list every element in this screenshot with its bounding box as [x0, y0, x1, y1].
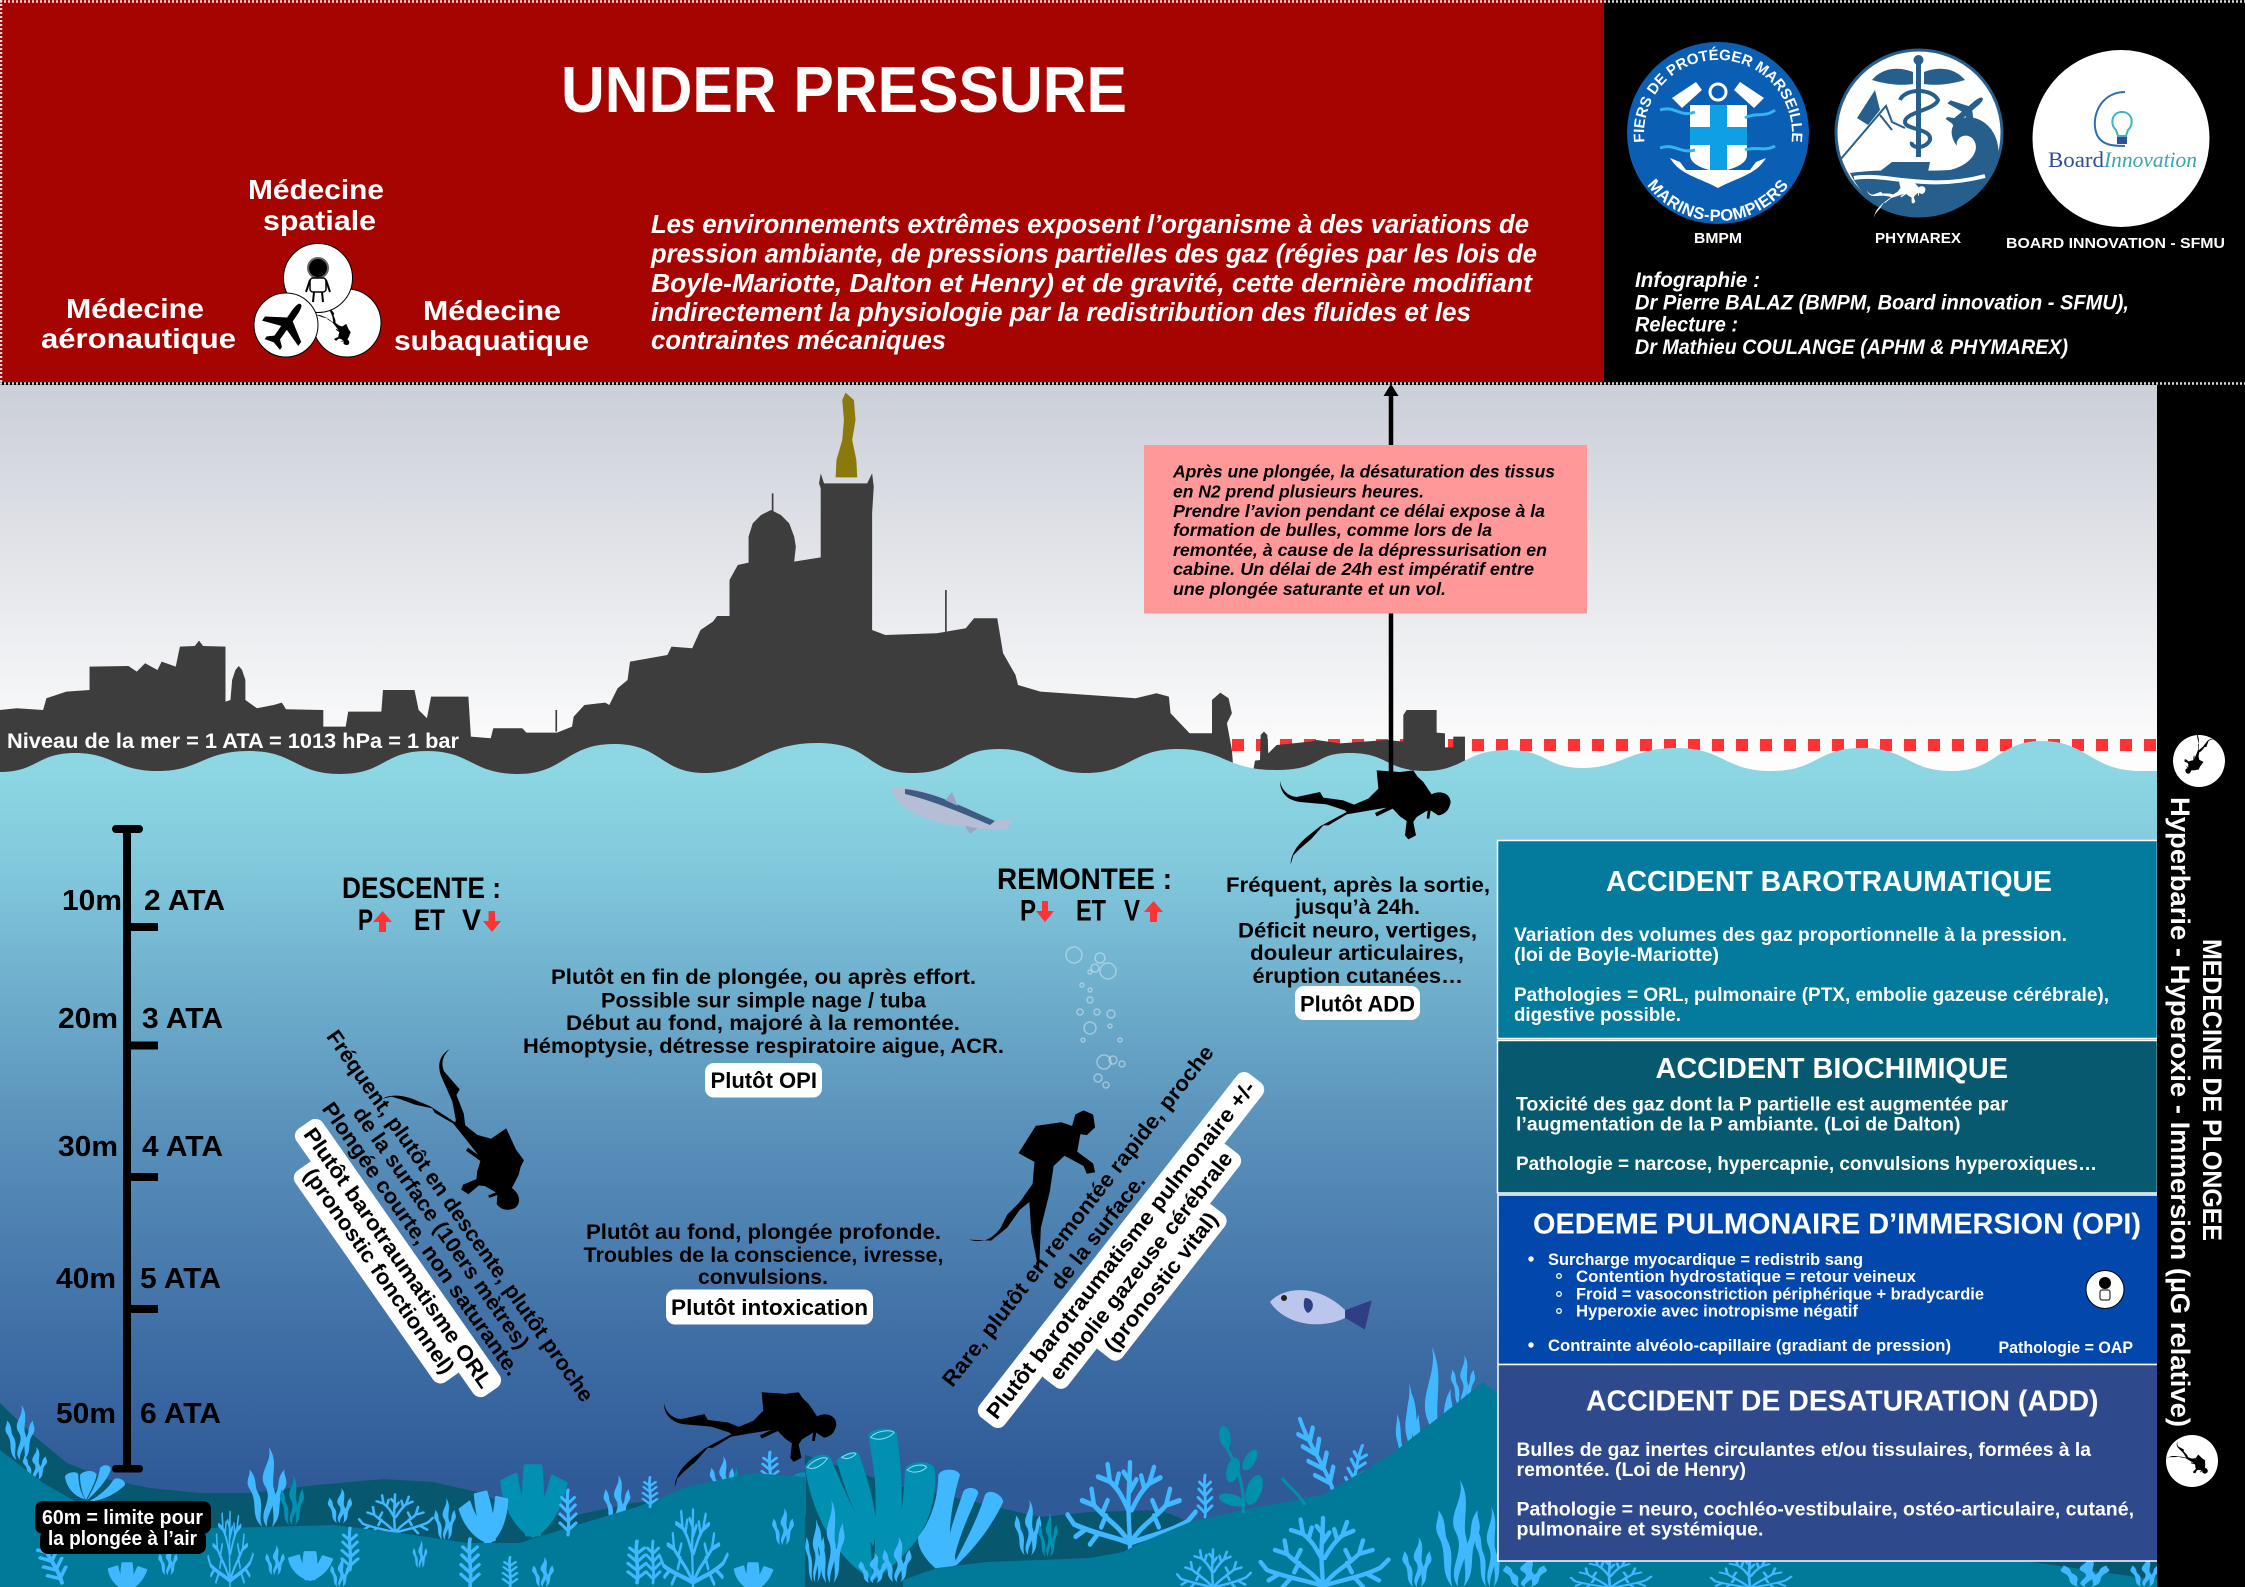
depth scale: 10m	[62, 885, 122, 917]
panel: accident biochimique	[1498, 1040, 2158, 1193]
OPI symptoms text: Hémoptysie, détresse respiratoire aigue, ACR.	[523, 1034, 1004, 1058]
label: médecine subaquatique: subaquatique	[394, 325, 589, 356]
front seaweed and corals	[109, 1480, 2160, 1587]
60m limit label: la plongée à l’air	[48, 1528, 197, 1550]
label: médecine subaquatique: Médecine	[423, 295, 561, 326]
dark teal seaweed	[280, 1467, 1058, 1557]
panel: accident de desaturation: remontée. (Loi de Henry)	[1516, 1459, 1746, 1481]
descent barotrauma badge: Plutôt barotraumatisme ORL	[299, 1123, 497, 1393]
logo captions: BOARD INNOVATION - SFMU	[2006, 235, 2225, 252]
descent barotrauma rotated text: Plongée courte, non saturante.	[317, 1098, 525, 1380]
front corals and ferns	[33, 1477, 1791, 1587]
callout: flying after diving	[1144, 445, 1587, 614]
logo: Board Innovation	[2032, 50, 2210, 227]
panel heading: OEDEME PULMONAIRE D’IMMERSION (OPI)	[1533, 1208, 2141, 1240]
logo captions	[1694, 230, 2225, 252]
panel: accident de desaturation: pulmonaire et systémique.	[1516, 1518, 1764, 1540]
sky background	[0, 385, 2157, 785]
back ferns	[762, 1415, 1370, 1517]
panel: oedeme pulmonaire d'immersion	[1498, 1195, 2158, 1364]
black column edge cover	[2157, 835, 2159, 1565]
side icon: diver top	[2173, 729, 2225, 787]
60m limit label: 60m = limite pour	[42, 1507, 203, 1529]
logo: PHYMAREX	[1836, 50, 2002, 218]
descent barotrauma rotated text: de la surface (10ers mètres)	[348, 1102, 534, 1354]
depth scale	[56, 825, 225, 1472]
header: black partners panel	[1604, 0, 2245, 382]
back corals	[359, 1462, 1196, 1548]
descent heading: P	[358, 904, 373, 937]
seabed back layers	[0, 1403, 2157, 1587]
top diver	[1280, 770, 1451, 864]
callout: flying after diving: formation de bulles, comme lors de la	[1173, 520, 1492, 540]
sea water with waves	[0, 741, 2157, 1587]
OPI symptoms text: Plutôt en fin de plongée, ou après effort.	[551, 965, 976, 989]
back seaweed	[0, 1347, 1475, 1555]
descent heading: DESCENTE :	[342, 872, 501, 905]
descent heading: ET	[414, 904, 445, 937]
60m limit label	[35, 1501, 211, 1554]
callout: flying after diving: Après une plongée, la désaturation des tissus	[1172, 462, 1555, 482]
logo: BMPM: MARINS-POMPIERS	[1648, 178, 1788, 221]
ADD symptoms text: Fréquent, après la sortie,	[1226, 873, 1490, 897]
label: médecine aéronautique: Médecine	[66, 293, 204, 324]
OPI symptoms text: Possible sur simple nage / tuba	[601, 988, 927, 1012]
surface pressure dashed line	[464, 739, 2157, 751]
panel: accident barotraumatique	[1498, 840, 2158, 1038]
logo: BMPM: FIERS DE PROTÉGER MARSEILLE	[1634, 46, 1802, 142]
credits: Dr Mathieu COULANGE (APHM & PHYMAREX)	[1635, 336, 2068, 359]
side heading: médecine de plongée: MEDECINE DE PLONGEE	[2197, 939, 2227, 1241]
intro paragraph: pression ambiante, de pressions partielles des gaz (régies par les lois de	[650, 240, 1537, 268]
ADD symptoms text: jusqu’à 24h.	[1294, 895, 1420, 919]
ADD badge	[1295, 986, 1420, 1020]
bubbles	[1066, 947, 1125, 1088]
callout: flying after diving: une plongée saturante et un vol.	[1173, 579, 1446, 599]
ADD badge: Plutôt ADD	[1300, 992, 1415, 1016]
intro paragraph: contraintes mécaniques	[651, 327, 946, 355]
teal leafy plant	[1219, 1426, 1305, 1513]
depth scale: 2 ATA	[144, 885, 225, 917]
panel: accident de desaturation: Pathologie = neuro, cochléo-vestibulaire, ostéo-articulaire, cutané,	[1516, 1498, 2134, 1520]
descending diver	[377, 1044, 542, 1239]
callout: flying after diving: Prendre l’avion pendant ce délai expose à la	[1173, 501, 1545, 521]
right black column	[2157, 385, 2245, 1587]
ascent heading	[997, 863, 1172, 928]
depth scale: 3 ATA	[142, 1003, 223, 1035]
intoxication symptoms text: Plutôt au fond, plongée profonde.	[586, 1220, 941, 1244]
ascent barotrauma badge: Plutôt barotraumatisme pulmonaire +/-	[982, 1076, 1260, 1424]
depth scale: 5 ATA	[140, 1263, 221, 1295]
depth scale: 40m	[56, 1263, 116, 1295]
panel heading: ACCIDENT DE DESATURATION (ADD)	[1586, 1386, 2098, 1418]
OPI badge	[705, 1063, 822, 1098]
panel: oedeme pulmonaire d'immersion: Hyperoxie avec inotropisme négatif	[1576, 1302, 1858, 1320]
ADD symptoms text: éruption cutanées…	[1252, 964, 1463, 988]
light blue sponges back	[7, 1465, 1003, 1571]
intro paragraph: Les environnements extrêmes exposent l’organisme à des variations de	[651, 211, 1529, 239]
panel: accident barotraumatique: (loi de Boyle-Mariotte)	[1514, 944, 1719, 966]
title: UNDER PRESSURE	[561, 53, 1127, 126]
ADD symptoms text	[1226, 873, 1490, 988]
logo captions: BMPM	[1694, 230, 1742, 247]
intoxication symptoms text: convulsions.	[698, 1265, 828, 1289]
descent heading: V	[462, 904, 481, 937]
side subheading: Hyperbarie - Hyperoxie - Immersion (µG relative)	[2165, 797, 2195, 1427]
label: médecine aéronautique: aéronautique	[41, 323, 236, 354]
ascent barotrauma badge: embolie gazeuse cérébrale	[1044, 1147, 1238, 1385]
label: médecine aéronautique	[41, 293, 236, 354]
sardine fish	[892, 787, 1013, 834]
header: red banner	[0, 0, 1604, 382]
panel: accident barotraumatique: digestive possible.	[1514, 1004, 1681, 1026]
intoxication symptoms text: Troubles de la conscience, ivresse,	[584, 1243, 944, 1267]
descent barotrauma rotated text: Fréquent, plutôt en descente, plutôt proche	[322, 1026, 598, 1406]
descent heading	[342, 872, 501, 937]
depth scale: 20m	[58, 1003, 118, 1035]
logo captions: PHYMAREX	[1875, 230, 1961, 247]
credits: Dr Pierre BALAZ (BMPM, Board innovation - SFMU),	[1635, 292, 2129, 314]
depth scale: 6 ATA	[140, 1398, 221, 1430]
panel: oedeme pulmonaire d'immersion: Froid = vasoconstriction périphérique + bradycardie	[1576, 1286, 1984, 1304]
panel: accident barotraumatique: Variation des volumes des gaz proportionnelle à la pression.	[1514, 924, 2067, 946]
intoxication badge	[666, 1290, 873, 1324]
logo: Board Innovation: Board	[2048, 147, 2104, 172]
ascent barotrauma rotated text: Rare, plutôt en remontée rapide, proche	[937, 1041, 1219, 1391]
Marseille skyline silhouette	[0, 393, 1465, 793]
depth scale: 30m	[58, 1131, 118, 1163]
ascent heading: P	[1020, 894, 1036, 928]
logo: BMPM	[1627, 42, 1809, 224]
depth scale: 50m	[56, 1398, 116, 1430]
ascent heading: REMONTEE :	[997, 863, 1172, 896]
label: médecine spatiale: spatiale	[263, 205, 376, 236]
depth scale: 4 ATA	[142, 1131, 223, 1163]
label: médecine spatiale	[248, 174, 384, 236]
sea level label: Niveau de la mer = 1 ATA = 1013 hPa = 1 bar	[7, 730, 459, 753]
panel: accident biochimique: Toxicité des gaz dont la P partielle est augmentée par	[1516, 1094, 2008, 1116]
credits	[1635, 269, 2129, 359]
panel heading: ACCIDENT BIOCHIMIQUE	[1656, 1053, 2008, 1085]
credits: Infographie :	[1635, 269, 1760, 292]
large teal sponges	[502, 1429, 935, 1580]
OPI badge: Plutôt OPI	[710, 1068, 817, 1093]
intro paragraph: Boyle-Mariotte, Dalton et Henry) et de gravité, cette dernière modifiant	[651, 270, 1534, 298]
ascent barotrauma badge: (pronostic vital)	[1099, 1208, 1223, 1356]
intoxication badge: Plutôt intoxication	[671, 1295, 868, 1320]
callout: flying after diving: en N2 prend plusieurs heures.	[1173, 482, 1424, 502]
callout: flying after diving: cabine. Un délai de 24h est impératif entre	[1173, 559, 1534, 579]
panel: accident barotraumatique: Pathologies = ORL, pulmonaire (PTX, embolie gazeuse cérébrale),	[1514, 984, 2109, 1006]
panel: accident de desaturation: Bulles de gaz inertes circulantes et/ou tissulaires, formées à la	[1516, 1439, 2091, 1461]
panel: oedeme pulmonaire d'immersion: Surcharge myocardique = redistrib sang	[1548, 1251, 1863, 1269]
panel: oedeme pulmonaire d'immersion: Contention hydrostatique = retour veineux	[1576, 1268, 1917, 1286]
ascending diver	[969, 1110, 1095, 1272]
descent barotrauma badge: (pronostic fonctionnel)	[299, 1164, 459, 1378]
credits: Relecture :	[1635, 314, 1738, 336]
intro paragraph	[650, 211, 1537, 355]
OPI symptoms text	[523, 965, 1004, 1058]
panel heading: ACCIDENT BAROTRAUMATIQUE	[1606, 866, 2052, 898]
panel: accident biochimique: l’augmentation de la P ambiante. (Loi de Dalton)	[1516, 1114, 1960, 1136]
ascent heading: ET	[1076, 894, 1106, 928]
ADD symptoms text: Déficit neuro, vertiges,	[1238, 918, 1477, 942]
logo: Board Innovation: Innovation	[2103, 147, 2197, 172]
intro paragraph: indirectement la physiologie par la redistribution des fluides et les	[651, 299, 1471, 327]
statue of Notre-Dame de la Garde	[836, 393, 857, 477]
label: médecine spatiale: Médecine	[248, 174, 384, 205]
dotted header edges	[0, 0, 2245, 384]
three medicine icons	[254, 244, 381, 357]
ADD symptoms text: douleur articulaires,	[1250, 941, 1464, 965]
panel: oedeme pulmonaire d'immersion: Pathologie = OAP	[1998, 1339, 2133, 1357]
ascent heading: V	[1124, 894, 1140, 928]
label: médecine subaquatique	[394, 295, 589, 356]
icon: astronaut	[2086, 1270, 2124, 1308]
panel: accident biochimique: Pathologie = narcose, hypercapnie, convulsions hyperoxiques…	[1516, 1153, 2097, 1175]
side icon: diver bottom	[2165, 1435, 2218, 1487]
panel: oedeme pulmonaire d'immersion: Contrainte alvéolo-capillaire (gradiant de pression)	[1548, 1337, 1951, 1355]
OPI symptoms text: Début au fond, majoré à la remontée.	[566, 1011, 960, 1035]
intoxication symptoms text	[584, 1220, 944, 1289]
ascent barotrauma rotated text: de la surface.	[1046, 1170, 1150, 1294]
blue fish	[1270, 1290, 1372, 1330]
bottom diver	[664, 1392, 836, 1487]
front seabed layer	[0, 1382, 2157, 1587]
callout: flying after diving: remontée, à cause de la dépressurisation en	[1173, 540, 1547, 560]
arrow to plane altitude	[1384, 384, 1398, 772]
panel: accident de desaturation	[1498, 1364, 2158, 1561]
